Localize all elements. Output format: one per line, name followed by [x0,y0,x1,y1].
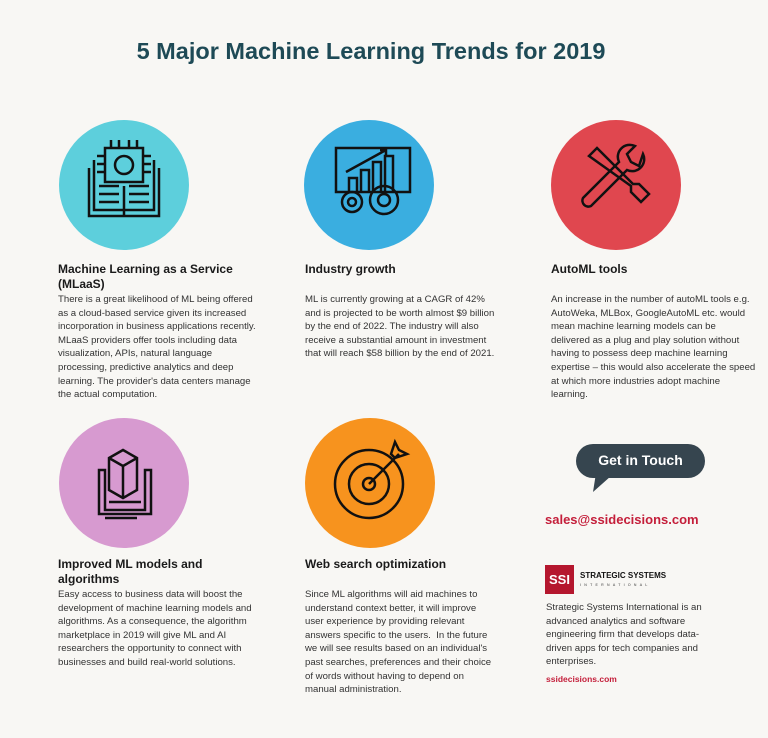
heading: Improved ML models and algorithms [58,557,202,586]
logo [545,565,666,594]
text: ML is currently growing at a CAGR of 42% and is projected to be worth almost $9 billion by the end of 2022. The industry will also receive a substantial amount in investment that will reach $58 billion by the end of 2021. [305,294,494,359]
logo: STRATEGIC SYSTEMS [580,571,666,580]
callout: get in touch [576,444,705,492]
email: sales@ssidecisions.com [545,512,699,527]
callout: get in touch: Get in Touch [598,452,683,468]
icon: tools [551,120,681,250]
logo: INTERNATIONAL [580,583,651,587]
text: Since ML algorithms will aid machines to understand context better, it will improve user experience by providing relevant answers specific to the users. In the future we will see results based on an individual's past searches, preferences and their choice of words without having to depend on manual administration. [305,589,491,695]
panel: AutoML [551,120,755,400]
panel: MLaaS [58,120,256,400]
text: An increase in the number of autoML tools e.g. AutoWeka, MLBox, GoogleAutoML etc. would mean machine learning models can be delivered as a plug and play solution without having to possess deep machine learning expertise – this would also accelerate the speed at which more industries adopt machine learning. [551,294,755,400]
icon: chart gears [304,120,434,250]
title: 5 Major Machine Learning Trends for 2019 [137,38,605,64]
website: ssidecisions.com [546,674,617,684]
heading: AutoML tools [551,262,627,276]
panel: improved models [58,418,252,668]
heading: Industry growth [305,262,396,276]
company text: Strategic Systems International is an advanced analytics and software engineering firm that develops data-driven apps for tech companies and enterprises. [546,602,702,667]
icon: target [305,418,435,548]
icon: 3d model [59,418,189,548]
panel: industry growth [304,120,494,359]
panel: web search [305,418,491,695]
heading: Machine Learning as a Service (MLaaS) [58,262,233,291]
text: Easy access to business data will boost the development of machine learning models and algorithms. As a consequence, the algorithm marketplace in 2019 will give ML and AI researchers the opportunity to connect with businesses and build real-world solutions. [58,589,252,668]
heading: Web search optimization [305,557,446,571]
text: There is a great likelihood of ML being offered as a cloud-based service given its increased incorporation in business applications recently. MLaaS providers offer tools including data visualization, APIs, natural language processing, predictive analytics and deep learning. The provider's data centers manage the actual computation. [58,294,256,400]
logo: SSI [549,572,570,587]
icon: book chip [59,120,189,250]
